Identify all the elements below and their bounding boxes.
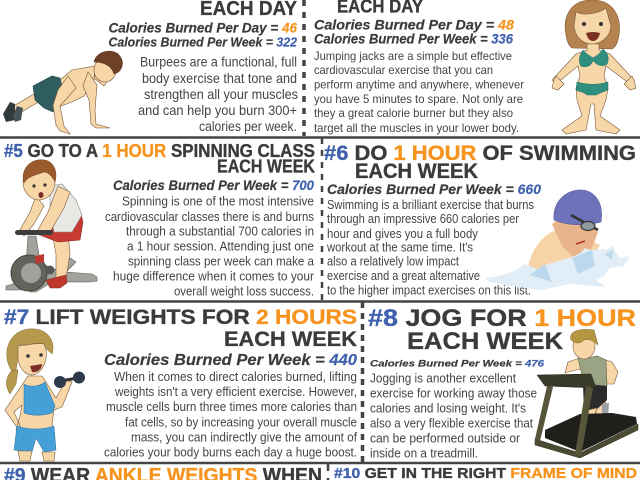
text block: jumping jacks description: Jumping jacks are a simple but effective (314, 49, 512, 63)
text block: swimming description: to the higher impact exercises on this list. (327, 283, 531, 297)
icon: woman doing jumping jacks (552, 0, 636, 134)
text block: weights description: When it comes to direct calories burned, lifting (114, 369, 357, 384)
panel: #5 spinning class (4, 141, 315, 299)
heading: do 1 hour of swimming: #6 DO 1 HOUR OF SWIMMING (324, 142, 636, 165)
text block: weights description: calories your body burns each day a huge boost. (104, 445, 357, 460)
text block: burpees description: Burpees are a functional, full (140, 54, 297, 70)
stat: calories burned per day: Calories Burned Per Day = 48 (314, 18, 515, 32)
panel: #6 swimming (324, 142, 636, 297)
heading: each week: EACH WEEK (224, 328, 357, 351)
text block: jumping jacks description: perform anytime and anywhere, whenever (314, 78, 524, 92)
icon: man on a spinning bike (6, 160, 97, 292)
panel: #8 jogging (368, 305, 638, 460)
stat: calories burned per week: Calories Burned Per Week = 660 (327, 181, 541, 197)
icon: woman lifting a dumbbell (5, 329, 85, 461)
text block: spinning description: through a substantial 700 calories in (126, 224, 314, 239)
text block: jogging description (370, 372, 537, 460)
panel: #3 burpees (3, 0, 298, 134)
text block: swimming description: Swimming is a brilliant exercise that burns (327, 198, 534, 212)
text block: burpees description: body exercise that tone and (142, 70, 297, 86)
heading: jog for 1 hour: #8 JOG FOR 1 HOUR (368, 305, 636, 332)
panel: #4 jumping jacks (314, 0, 636, 135)
icon: man doing a burpee (3, 51, 122, 134)
text block: jogging description: inside on a treadmill. (370, 446, 478, 460)
text block: spinning description: spinning class per week can make a (128, 254, 315, 269)
stat: calories burned per day: Calories Burned Per Day = 46 (108, 20, 297, 36)
stat: calories burned per week: Calories Burned Per Week = 476 (370, 359, 545, 370)
text block: jogging description: can be performed outside or (370, 431, 520, 445)
text block: burpees description (138, 54, 298, 134)
icon: swimmer in splash (484, 190, 630, 290)
heading: lift weights for 2 hours: #7 LIFT WEIGHTS FOR 2 HOURS (4, 306, 357, 329)
text block: jumping jacks description: cardiovascular exercise that you can (314, 63, 493, 77)
text block: weights description: fat cells, so by increasing your overall muscle (125, 415, 357, 430)
text block: spinning description: a 1 hour session. Attending just one (127, 239, 314, 254)
text block: jogging description: exercise for working away those (370, 387, 537, 401)
panel: #7 lift weights (4, 306, 357, 461)
text block: burpees description: and can help you burn 300+ (138, 102, 297, 118)
text block: spinning description: overall weight loss success. (174, 284, 314, 299)
heading: go to a 1 hour spinning class: #5 GO TO A 1 HOUR SPINNING CLASS (4, 141, 315, 161)
text block: spinning description: cardiovascular classes there is and burns (105, 209, 314, 224)
stat: calories burned per week: Calories Burned Per Week = 336 (314, 32, 513, 46)
text block: swimming description: through an impressive 660 calories per (327, 212, 519, 226)
text block: swimming description: exercise and a great alternative (327, 269, 480, 283)
heading: each week: EACH WEEK (217, 156, 315, 176)
text block: jogging description: calories and losing weight. It's (370, 402, 526, 416)
stat: calories burned per week: Calories Burned Per Week = 440 (104, 352, 357, 369)
text block: weights description (104, 369, 357, 460)
stat: calories burned per week: Calories Burned Per Week = 322 (108, 36, 297, 50)
text block: burpees description: calories per week. (199, 118, 297, 134)
stat: calories burned per week: Calories Burned Per Week = 700 (113, 178, 314, 193)
text block: swimming description: also a relatively low impact (327, 255, 459, 269)
text block: jumping jacks description: target all the muscles in your lower body. (314, 121, 519, 135)
text block: weights description: mass, you can indirectly give the amount of (131, 430, 357, 445)
text block: spinning description: huge difference when it comes to your (113, 269, 315, 284)
text block: jogging description: also a very flexible exercise that (370, 417, 533, 431)
text block: spinning description: Spinning is one of the most intensive (122, 194, 314, 209)
text block: burpees description: strengthen all your muscles (144, 86, 298, 102)
text block: swimming description: workout at the same time. It's (326, 241, 473, 255)
text block: jumping jacks description: you have 5 minutes to spare. Not only are (314, 92, 523, 106)
text block: spinning description (105, 194, 315, 299)
text block: swimming description (326, 198, 534, 297)
text block: weights description: weights isn't a very efficient exercise. However, (114, 384, 357, 399)
heading: each week: EACH WEEK (407, 328, 564, 355)
icon: man jogging on a treadmill (535, 329, 638, 458)
text block: weights description: muscle cells burn three times more calories than (106, 399, 357, 414)
text block: jumping jacks description (314, 49, 524, 135)
text block: jogging description: Jogging is another excellent (370, 372, 516, 386)
heading: each week: EACH WEEK (355, 160, 478, 183)
text block: swimming description: hour and gives you a full body (327, 227, 479, 241)
text block: jumping jacks description: they a great calorie burner but they also (314, 106, 513, 120)
